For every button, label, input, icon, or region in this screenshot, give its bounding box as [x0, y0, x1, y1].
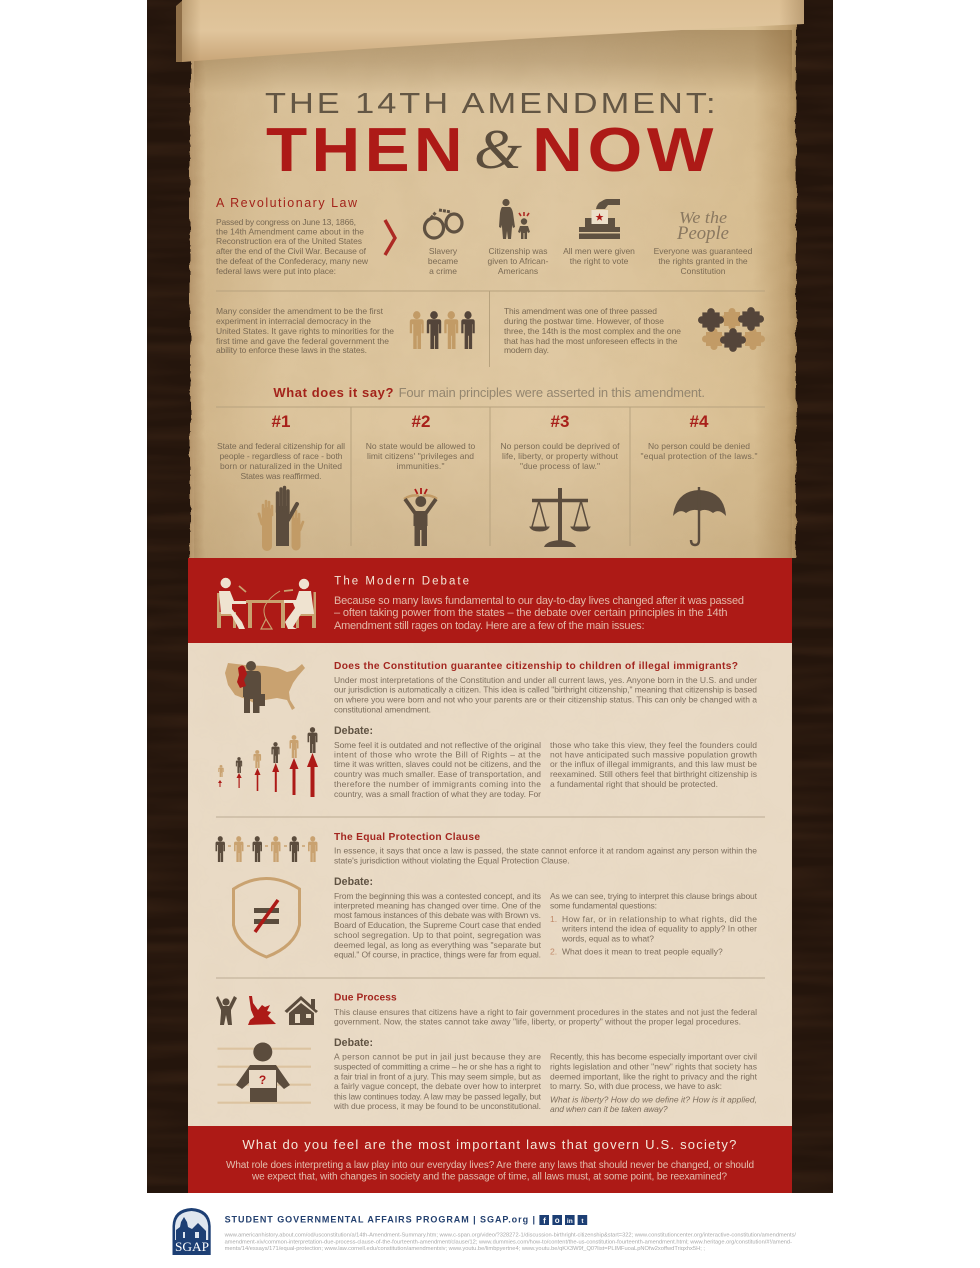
footer: references: www.americanhistory.about.com/od/usconstitution/a/14th-Amendment-Summary.htm; www.c-span.org/video/?328272-1/discussion-birthright-citizenship&start=322; www.constitutioncenter.org/interactive-constitution/amendments/ [224, 1232, 796, 1238]
label: citizenship: Americans [498, 266, 538, 276]
question list: words, equal as to what? [561, 934, 654, 944]
debate left column: equal." Of course, in practice, things were far from equal. [334, 950, 541, 960]
footer: social icons [539, 1215, 587, 1226]
icon: house [284, 996, 318, 1025]
icon: mother and child [499, 199, 530, 239]
icon: statue of liberty [248, 996, 276, 1025]
debate left column: with due process, it may be found to be unconstitutional. [333, 1101, 541, 1111]
title word: now: NOW [532, 116, 718, 185]
icon: two debaters at table [217, 578, 316, 629]
debate right column: not have anticipated such massive population growth [550, 750, 757, 760]
intro text: Amendment still rages on today. Here are a few of the main issues: [334, 620, 644, 632]
debate heading: Debate: [334, 1037, 373, 1049]
debate right column: to marry. So, with due process, we have to ask: [550, 1081, 722, 1091]
icon: we the people script: People [676, 223, 729, 244]
text: life, liberty, or property without [502, 451, 619, 461]
description: our jurisdiction is automatically a citizen. This idea is called "birthright citizenship," meaning that citizenship is based [334, 684, 757, 694]
debate left column: From the beginning this was a contested concept, and its [334, 891, 541, 901]
icon: person breaking chains [404, 488, 437, 546]
debate right column [550, 891, 758, 956]
description: on where you were born and not who your parents are or their citizenship status. This can only be changed with a [334, 694, 757, 704]
icon: we the people script [676, 208, 729, 244]
text block: Many consider the amendment to be the first [216, 306, 384, 316]
icon: person with raised arms [216, 996, 237, 1025]
intro text: the defeat of the Confederacy, many new [216, 256, 369, 266]
footer: social icons: in [567, 1218, 573, 1225]
debate right column [550, 1052, 758, 1114]
text block: ability to enforce these laws in the states. [216, 345, 367, 355]
title line 1: THE 14TH AMENDMENT: [265, 88, 718, 120]
footer: organization name: STUDENT GOVERNMENTAL AFFAIRS PROGRAM | SGAP.org | [225, 1215, 535, 1225]
debate left column: a fair trial in front of a jury. This may seem simple, but as [334, 1071, 541, 1081]
panel: a revolutionary law [216, 196, 753, 276]
parchment scroll [190, 10, 796, 580]
debate heading: Debate: [334, 725, 373, 737]
heading: What do you feel are the most important laws that govern U.S. society? [242, 1137, 736, 1152]
icon: handcuffs [424, 210, 462, 238]
panel: three amendments [504, 306, 765, 355]
panel: first experiment [216, 306, 475, 355]
label: slavery [428, 246, 458, 276]
label: citizenship: given to African- [488, 256, 549, 266]
text: What role does interpreting a law play into our everyday lives? Are there any laws that should never be changed, or should [226, 1160, 754, 1171]
intro text [334, 595, 744, 632]
text block: first time and gave the federal government the [216, 336, 389, 346]
text [217, 441, 345, 481]
debate right column: or the influx of illegal immigrants, and this law must be [550, 759, 757, 769]
description: This clause ensures that citizens have a right to fair government procedures in the states and not just the federal [334, 1007, 757, 1017]
intro text: Passed by congress on June 13, 1866, [216, 217, 356, 227]
heading: Due Process [334, 993, 397, 1004]
title [265, 88, 718, 185]
text [500, 441, 620, 471]
text: No person could be denied [648, 441, 750, 451]
description: In essence, it says that once a law is passed, the state cannot enforce it at random against any person within the [334, 846, 757, 856]
text: we expect that, with changes in society and the passage of time, all laws must, at some point, be reexamined? [251, 1172, 727, 1182]
logo: SGAP [172, 1208, 211, 1255]
question list: How far, or in relationship to what rights, did the [562, 914, 757, 924]
panel: birthright citizenship [218, 661, 757, 799]
intro text: the 14th Amendment came about in the [216, 226, 364, 236]
footer: references: ments/14/essays/171/equal-protection; www.law.cornell.edu/constitution/amendmentxiv; www.youtu.be/limbpyertne4; www.youtu.be/qKX3W9f_Q0?list=PLIMFuoaLpNOfw2xoffwdTriqxhx5H; ; [225, 1246, 705, 1252]
debate right column: reexamined. Still others feel that birthright citizenship is [550, 769, 757, 779]
text: born or naturalized in the United [220, 461, 342, 471]
heading: what does it say: Four main principles were asserted in this amendment. [399, 385, 705, 400]
icon: scales of justice [530, 488, 590, 547]
debate left column [334, 740, 541, 799]
text [640, 441, 758, 461]
debate left column: A person cannot be put in jail just because they are [334, 1052, 541, 1062]
text [366, 441, 476, 471]
text: States was reaffirmed. [240, 471, 322, 481]
debate left column [334, 891, 542, 960]
label: everyone [654, 246, 753, 276]
icon: we the people script: We the [679, 208, 727, 227]
debate left column: intent of those who wrote the Bill of Rights – at the [334, 750, 541, 760]
intro text: after the end of the Civil War. Because of [216, 246, 367, 256]
icon: row of people [216, 836, 317, 862]
heading: Does the Constitution guarantee citizenship to children of illegal immigrants? [334, 661, 738, 672]
text block: This amendment was one of three passed [504, 306, 657, 316]
icon: ballot box [579, 199, 620, 239]
debate heading: Debate: [334, 876, 373, 888]
logo: SGAP: SGAP [175, 1240, 209, 1254]
number: #4 [690, 412, 709, 431]
description [334, 1007, 757, 1026]
icon: umbrella [673, 487, 726, 545]
panel: principle 3 [500, 412, 620, 547]
number: #2 [412, 412, 430, 431]
question list [550, 914, 757, 956]
panel: due process [216, 993, 758, 1114]
debate left column: Board of Education, the Supreme Court case that ended [334, 920, 541, 930]
icon: growth of population [218, 727, 318, 797]
question list: writers intend the idea of equality to apply? In other [561, 923, 757, 933]
panel: principle 2 [366, 412, 476, 546]
text: No state would be allowed to [366, 441, 476, 451]
wood background [147, 0, 833, 1193]
icon: person in police lineup [218, 1042, 311, 1103]
icon: shield with not-equal sign [234, 878, 300, 957]
label: slavery: Slavery [429, 246, 458, 256]
label: vote [563, 246, 635, 266]
description: state's jurisdiction without violating the Equal Protection Clause. [334, 856, 570, 866]
description [334, 846, 757, 866]
panel: principle 1 [217, 412, 345, 546]
description: Under most interpretations of the Constitution and under all current laws, yes. Anyone born in the U.S. and under [334, 675, 757, 685]
footer: references: amendment-xiv/common-interpretation-due-process-clause-of-the-fourteenth-amendment/clause/12; www.dummies.com/how-to/content/the-us-constitution-fourteenth-amendment.html; www.heritage.org/constitution/#!/amend- [225, 1240, 792, 1246]
debate right column: Recently, this has become especially important over civil [550, 1052, 757, 1062]
text block: that has had the most unforeseen effects in the [504, 336, 678, 346]
footer: social icons: o [555, 1216, 560, 1225]
debate right column: deemed important, like the right to privacy and the right [550, 1071, 758, 1081]
label: everyone: Everyone was guaranteed [654, 246, 753, 256]
question list: 2. [550, 946, 557, 956]
text block: three, the 14th is the most complex and the one [504, 326, 681, 336]
label: citizenship [488, 246, 549, 276]
icon: chevron arrow [385, 220, 395, 255]
text: No person could be deprived of [500, 441, 620, 451]
footer: social icons: f [543, 1216, 546, 1226]
heading: The Modern Debate [334, 576, 469, 588]
text: limit citizens' "privileges and [367, 451, 474, 461]
cream background [188, 643, 792, 1126]
label: slavery: became [428, 256, 458, 266]
text block: experiment in interracial democracy in the [216, 316, 371, 326]
debate left column: interpreted meaning has changed over time. One of the [334, 900, 541, 910]
panel: the modern debate banner [188, 558, 792, 643]
scroll roll [176, 0, 804, 62]
panel: equal protection clause [216, 832, 758, 960]
debate left column: most famous instances of this debate was with Brown vs. [334, 910, 541, 920]
debate right column: What is liberty? How do we define it? How is it applied, [550, 1094, 757, 1104]
label: everyone: Constitution [681, 266, 726, 276]
label: everyone: the rights granted in the [658, 256, 748, 266]
label: citizenship: Citizenship was [488, 246, 548, 256]
debate left column: a fairly vague concept, the debate over how to interpret [334, 1081, 542, 1091]
description [334, 675, 757, 714]
intro text: federal laws were put into place: [216, 266, 336, 276]
number: #3 [551, 412, 569, 431]
text [226, 1160, 754, 1182]
icon: four people [410, 311, 475, 349]
debate left column: school segregation. Up to that point, segregation was [334, 930, 541, 940]
heading: The Equal Protection Clause [334, 832, 480, 843]
label: slavery: a crime [429, 266, 457, 276]
debate left column: country, was a small fraction of what they are today. For [334, 789, 541, 799]
debate left column: country was much smaller. Ease of transportation, and [334, 769, 541, 779]
text: "equal protection of the laws." [640, 451, 758, 461]
description: government. Now, the states cannot take away "life, liberty, or property" without the proper legal procedures. [334, 1016, 741, 1026]
text: State and federal citizenship for all [217, 441, 345, 451]
text: immunities." [396, 461, 444, 471]
title word: then: THEN [266, 116, 467, 185]
debate left column [333, 1052, 542, 1111]
label: vote: All men were given [563, 246, 635, 256]
description: constitutional amendment. [334, 704, 431, 714]
debate right column: rights legislation and other "new" rights that society has [550, 1061, 757, 1071]
panel: closing question banner [188, 1126, 792, 1193]
icon: raised hands [259, 488, 303, 546]
text block: modern day. [504, 345, 549, 355]
footer: references [224, 1232, 796, 1252]
debate left column: suspected of committing a crime – he or she has a right to [334, 1061, 541, 1071]
intro text: – often taking power from the states – the debate over certain principles in the 14th [334, 607, 728, 619]
text: "due process of law." [520, 461, 600, 471]
question list: What does it mean to treat people equally? [562, 946, 723, 956]
debate right column [550, 740, 757, 789]
text block [216, 306, 394, 355]
text block: United States. It gave rights to minorities for the [216, 326, 394, 336]
debate left column: deemed legal, as long as everything was "separate but [334, 940, 542, 950]
panel: principle 4 [640, 412, 758, 545]
heading: A Revolutionary Law [216, 196, 358, 210]
icon: puzzle pieces [698, 307, 765, 352]
heading: what does it say: What does it say? [273, 385, 393, 400]
text block [504, 306, 681, 355]
debate left column: therefore the number of immigrants coming into the [334, 779, 541, 789]
title ampersand: & [474, 119, 522, 181]
intro text: Reconstruction era of the United States [216, 236, 362, 246]
debate right column: As we can see, trying to interpret this clause brings about [550, 891, 758, 901]
question list: 1. [550, 914, 557, 924]
debate left column: Some feel it is outdated and not reflective of the original [334, 740, 541, 750]
text block: during the postwar time. However, of those [504, 316, 664, 326]
debate left column: this law continues today. A law may be passed legally, but [334, 1091, 542, 1101]
icon: map with parent and child [225, 661, 305, 713]
footer: social icons: t [581, 1218, 584, 1225]
debate right column: some fundamental questions: [550, 900, 657, 910]
intro text [216, 217, 369, 276]
text: people - regardless of race - both [220, 451, 343, 461]
debate left column: time it was written, slaves could not be citizens, and the [334, 759, 541, 769]
debate right column: and when can it be taken away? [550, 1104, 668, 1114]
debate right column: a fundamental right that should be protected. [550, 779, 718, 789]
debate right column: those who take this view, they feel the founders could [550, 740, 757, 750]
icon: person in police lineup: ? [259, 1073, 266, 1087]
intro text: Because so many laws fundamental to our day-to-day lives changed after it was passed [334, 595, 744, 607]
label: vote: the right to vote [570, 256, 629, 266]
number: #1 [272, 412, 290, 431]
